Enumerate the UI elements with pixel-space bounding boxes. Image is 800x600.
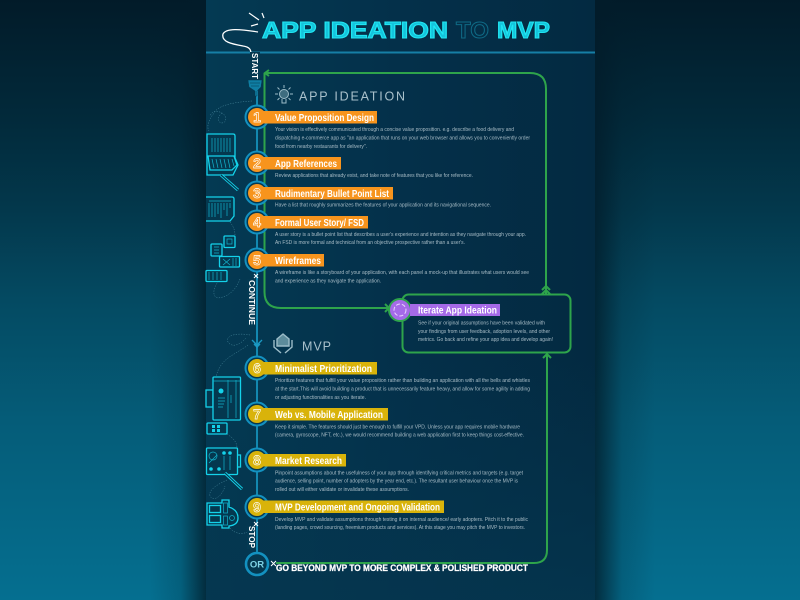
panel: iterate app ideation: metrics. Go back and refine your app idea and develop again! [418, 337, 553, 343]
step 5: 5 [253, 252, 261, 268]
step 8: Market Research [275, 456, 342, 467]
icon: screen layout [206, 377, 240, 420]
icon: book [207, 134, 238, 175]
step 1: dispatching e-commerce app as "an application that runs on your web browser and allows you to conveniently order [275, 136, 530, 142]
continue ribbon [247, 274, 258, 326]
stop ribbon [247, 522, 258, 549]
step 8: audience, selling point, number of adopters by the year end, etc.). The resultant user behaviour once the MVP is [275, 479, 518, 485]
panel: infographic sheet [206, 0, 595, 600]
step 2: Review applications that already exist, and take note of features that you like for reference. [275, 173, 473, 179]
icon: wireframes [206, 236, 240, 282]
step 5: A wireframe is like a storyboard of your application, with each panel a mock-up that illustrates what users would see [275, 270, 530, 276]
title: APP IDEATION [262, 17, 448, 43]
step 3 [246, 182, 491, 208]
closing statement: GO BEYOND MVP TO MORE COMPLEX & POLISHED PRODUCT [276, 563, 529, 573]
panel: iterate app ideation: Iterate App Ideation [418, 306, 497, 317]
step 3: Rudimentary Bullet Point List [275, 189, 390, 200]
step 7: (camera, gyroscope, NFT, etc.), we would recommend building a web application first to keep things cost-effective. [275, 432, 524, 438]
heading: app ideation: APP IDEATION [299, 90, 405, 104]
icon: magnifier [221, 175, 238, 190]
step 7: 7 [253, 406, 261, 422]
step 5: Wireframes [275, 256, 321, 267]
continue ribbon: CONTINUE [247, 280, 256, 326]
step 9: 9 [253, 499, 261, 515]
step 3: Have a list that roughly summarizes the features of your application and its navigational sequence. [275, 202, 491, 208]
icon: plug [248, 80, 262, 96]
green loop arrow [264, 70, 551, 563]
step 6: Minimalist Prioritization [275, 364, 372, 375]
step 7 [246, 402, 524, 438]
heading: mvp: MVP [302, 340, 331, 354]
icon: magnifier 2 [225, 473, 242, 489]
step 6: 6 [253, 360, 261, 376]
icon: chart board [206, 448, 240, 474]
step 9 [246, 496, 528, 531]
step 5 [246, 248, 530, 284]
icon: mobile grid [207, 423, 227, 434]
icon: light bulb [275, 85, 293, 103]
step 2: App References [275, 159, 337, 170]
step 7: Keep it simple. The features should just be enough to fulfill your VPD. Unless your app requires mobile hardware [275, 424, 521, 430]
step 1 [246, 106, 530, 150]
icon: x mark [271, 561, 276, 566]
step 8 [246, 448, 523, 493]
or node: OR [250, 560, 264, 570]
step 6: Prioritize features that fulfill your value proposition rather than building an application with all the bells and whistles [275, 378, 530, 384]
step 1: 1 [253, 109, 261, 125]
step 4: Formal User Story/ FSD [275, 218, 364, 229]
decorative dashed paths [208, 101, 252, 533]
step 6 [246, 356, 530, 401]
step 4 [246, 210, 526, 246]
step 5: and experience as they navigate the application. [275, 278, 381, 284]
step 4: A user story is a bullet point list that describes a user's experience and intention as they navigate through your app. [275, 232, 526, 238]
step 1: food from nearby restaurants for delivery". [275, 144, 367, 150]
header rule [206, 52, 595, 54]
icon: spark lines [249, 13, 264, 26]
icon: hands holding house [274, 334, 292, 353]
title: MVP [497, 17, 550, 43]
step 7: Web vs. Mobile Application [275, 410, 383, 421]
stop ribbon: STOP [247, 526, 256, 549]
title [262, 17, 550, 43]
start ribbon: START [250, 53, 259, 79]
panel: iterate app ideation: your findings from user feedback, adoption levels, and other [418, 329, 550, 335]
step 8: 8 [253, 452, 261, 468]
step 9: (landing pages, crowd sourcing, freemium products and services). At this stage you may pitch the MVP to investors. [275, 525, 525, 531]
icon: spine chevron [252, 340, 262, 347]
step 4: An FSD is more formal and technical from an objective prospective rather than a user's. [275, 240, 465, 246]
step 9: MVP Development and Ongoing Validation [275, 502, 440, 514]
step 1: Value Proposition Design [275, 113, 374, 124]
step 4: 4 [253, 214, 261, 230]
white cable [223, 30, 258, 54]
panel: iterate app ideation [389, 294, 570, 352]
step 8: rolled out will either validate or invalidate these assumptions. [275, 487, 409, 493]
step 2: 2 [253, 155, 261, 171]
step 2 [246, 152, 473, 179]
panel: iterate app ideation: See if your original assumptions have been validated with [418, 320, 545, 326]
or node [246, 553, 268, 575]
step 8: Pinpoint assumptions about the usefulness of your app through identifying critical metrics and targets (e.g. target [275, 470, 523, 476]
step 9: Develop MVP and validate assumptions through testing it on internal audience/ early adopters. Pitch it to the public [275, 517, 528, 523]
title: TO [456, 17, 489, 43]
step 6: or adjusting functionalities as you iterate. [275, 395, 366, 401]
step 1: Your vision is effectively communicated through a concise value proposition. e.g. describe a food delivery and [275, 127, 514, 133]
icon: product blueprint [207, 500, 238, 528]
timeline spine [256, 53, 258, 564]
icon: document panel [206, 197, 234, 221]
step 6: at the start.This will avoid building a product that is unnecessarily feature heavy, and allow for some agility in adding [275, 386, 530, 392]
step 3: 3 [253, 185, 261, 201]
